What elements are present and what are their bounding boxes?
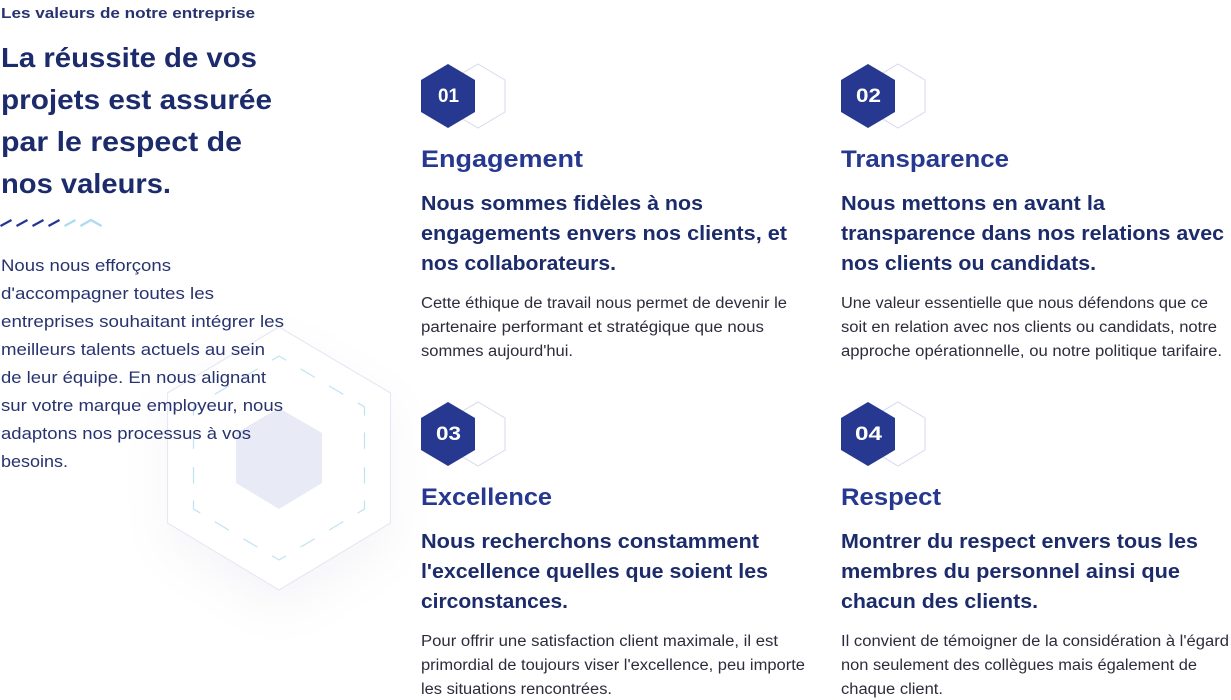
heading: Excellence: Excellence bbox=[421, 484, 552, 511]
icon: hexagon badge 04: 04 bbox=[855, 424, 883, 445]
description: Cette éthique de travail nous permet de devenir le bbox=[421, 295, 787, 312]
intro paragraph: meilleurs talents actuels au sein bbox=[1, 340, 265, 359]
subheading: engagements envers nos clients, et bbox=[421, 223, 787, 245]
intro paragraph: besoins. bbox=[1, 452, 68, 471]
heading: Respect: Respect bbox=[841, 484, 941, 511]
heading: Engagement: Engagement bbox=[421, 146, 583, 173]
subheading bbox=[841, 193, 1224, 275]
intro paragraph: Nous nous efforçons bbox=[1, 256, 171, 275]
decorative hexagon graphic bbox=[168, 327, 390, 590]
accent dashes and chevron bbox=[0, 220, 102, 226]
main title: projets est assurée bbox=[1, 84, 272, 115]
description: partenaire performant et stratégique que nous bbox=[421, 319, 764, 336]
intro paragraph: sur votre marque employeur, nous bbox=[1, 396, 283, 415]
icon: hexagon badge 04 bbox=[841, 402, 925, 466]
intro paragraph: d'accompagner toutes les bbox=[1, 284, 214, 303]
intro paragraph: entreprises souhaitant intégrer les bbox=[1, 312, 284, 331]
subheading bbox=[841, 531, 1198, 613]
description bbox=[841, 295, 1222, 360]
subheading: circonstances. bbox=[421, 591, 568, 613]
intro paragraph: de leur équipe. En nous alignant bbox=[1, 368, 266, 387]
intro paragraph: adaptons nos processus à vos bbox=[1, 424, 251, 443]
main title bbox=[1, 42, 272, 199]
subheading: nos clients ou candidats. bbox=[841, 253, 1096, 275]
subheading: transparence dans nos relations avec bbox=[841, 223, 1224, 245]
description: non seulement des collègues mais également de bbox=[841, 657, 1197, 674]
heading: Transparence: Transparence bbox=[841, 146, 1009, 173]
description: Une valeur essentielle que nous défendons que ce bbox=[841, 295, 1208, 312]
subheading: Nous mettons en avant la bbox=[841, 193, 1106, 215]
panel: value 04 Respect bbox=[841, 402, 1229, 698]
main title: par le respect de bbox=[1, 126, 242, 157]
subheading: Nous sommes fidèles à nos bbox=[421, 193, 703, 215]
description bbox=[421, 295, 787, 360]
subheading: l'excellence quelles que soient les bbox=[421, 561, 768, 583]
main title: nos valeurs. bbox=[1, 168, 171, 199]
description: Il convient de témoigner de la considération à l'égard bbox=[841, 633, 1229, 650]
description bbox=[421, 633, 805, 698]
subheading: nos collaborateurs. bbox=[421, 253, 616, 275]
main title: La réussite de vos bbox=[1, 42, 257, 73]
subheading: Nous recherchons constamment bbox=[421, 531, 759, 553]
description: soit en relation avec nos clients ou candidats, notre bbox=[841, 319, 1217, 336]
description: primordial de toujours viser l'excellence, peu importe bbox=[421, 657, 805, 674]
description bbox=[841, 633, 1229, 698]
intro paragraph bbox=[1, 256, 284, 471]
subheading: membres du personnel ainsi que bbox=[841, 561, 1180, 583]
icon: hexagon badge 02 bbox=[841, 64, 925, 128]
eyebrow heading: Les valeurs de notre entreprise bbox=[1, 5, 255, 22]
icon: hexagon badge 03: 03 bbox=[436, 424, 461, 445]
icon: hexagon badge 01: 01 bbox=[438, 86, 459, 107]
description: approche opérationnelle, ou notre politique tarifaire. bbox=[841, 343, 1222, 360]
panel: value 02 Transparence bbox=[841, 64, 1224, 360]
description: sommes aujourd'hui. bbox=[421, 343, 573, 360]
icon: hexagon badge 01 bbox=[421, 64, 505, 128]
description: Pour offrir une satisfaction client maximale, il est bbox=[421, 633, 779, 650]
icon: hexagon badge 03 bbox=[421, 402, 505, 466]
subheading: chacun des clients. bbox=[841, 591, 1038, 613]
description: les situations rencontrées. bbox=[421, 681, 612, 698]
description: chaque client. bbox=[841, 681, 943, 698]
icon: hexagon badge 02: 02 bbox=[856, 86, 881, 107]
subheading bbox=[421, 531, 768, 613]
subheading: Montrer du respect envers tous les bbox=[841, 531, 1198, 553]
panel: value 01 Engagement bbox=[421, 64, 787, 360]
panel: value 03 Excellence bbox=[421, 402, 805, 698]
subheading bbox=[421, 193, 787, 275]
